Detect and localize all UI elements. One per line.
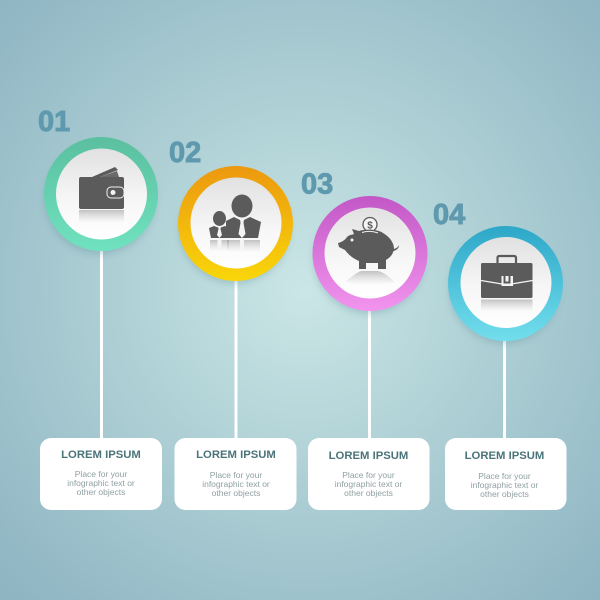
icon: two businessmen <box>209 194 261 252</box>
icon: briefcase <box>481 256 532 312</box>
card 2 text <box>202 470 270 498</box>
step 03 <box>301 168 428 314</box>
card 4 text: Place for your <box>478 471 531 481</box>
icon: piggy bank <box>338 218 399 285</box>
card 4 text <box>471 471 538 499</box>
ring 04 <box>448 226 563 344</box>
step 04 <box>433 199 563 344</box>
card 2 text: Place for your <box>210 470 262 480</box>
card 3 <box>308 438 430 510</box>
card 3 text <box>335 470 402 498</box>
card 1 text: other objects <box>77 487 125 497</box>
card 3 heading: LOREM IPSUM <box>329 450 408 462</box>
card 1 heading: LOREM IPSUM <box>61 449 141 461</box>
card 2 text: infographic text or <box>202 479 270 489</box>
card 2 <box>174 438 296 510</box>
card 4 text: infographic text or <box>471 480 538 490</box>
card 1 <box>40 438 162 510</box>
card 3 text: other objects <box>344 488 393 498</box>
card 4 text: other objects <box>480 489 529 499</box>
card 3 text: infographic text or <box>335 479 402 489</box>
card 2 heading: LOREM IPSUM <box>196 449 276 461</box>
connector lines <box>100 248 506 440</box>
number 02: 02 <box>169 137 201 169</box>
card 2 text: other objects <box>212 488 260 498</box>
ring 01 <box>44 137 158 254</box>
number 03: 03 <box>301 168 333 200</box>
card 3 text: Place for your <box>342 470 395 480</box>
card 1 text: Place for your <box>75 469 127 479</box>
ring 02 <box>178 166 293 284</box>
number 01: 01 <box>38 106 70 138</box>
icon: wallet <box>79 167 124 223</box>
ring 03 <box>312 196 428 314</box>
card 1 text: infographic text or <box>67 478 135 488</box>
step 01 <box>38 106 158 254</box>
icon: piggy bank: $ <box>367 220 373 232</box>
card 1 text <box>67 469 135 497</box>
card 4 heading: LOREM IPSUM <box>465 450 544 462</box>
step 02 <box>169 137 293 284</box>
number 04: 04 <box>433 199 465 231</box>
card 4 <box>445 438 566 510</box>
